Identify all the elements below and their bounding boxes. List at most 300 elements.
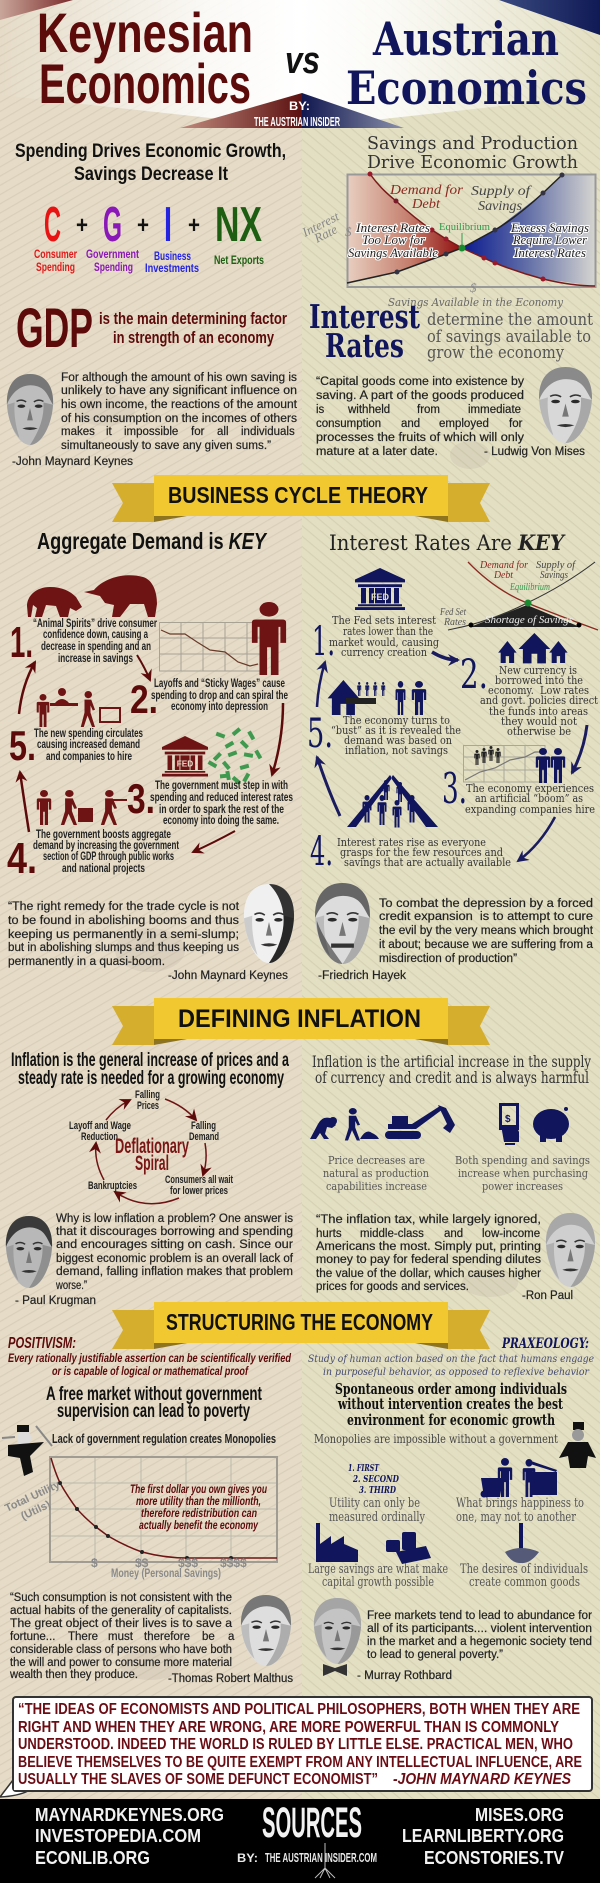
sources right: LEARNLIBERTY.ORG xyxy=(402,1826,564,1846)
sources right: MISES.ORG xyxy=(475,1805,564,1825)
quote: Malthus: The great object of their lives is to save a xyxy=(10,1618,233,1630)
footer: sources: SOURCES xyxy=(262,1799,362,1847)
quote: Rothbard: to lead to general poverty.” xyxy=(367,1649,503,1661)
step 1: currency creation xyxy=(341,646,427,659)
interest rates statement: Rates xyxy=(325,326,404,365)
step 1: decrease in spending and an xyxy=(41,639,151,653)
text: savings and desires: Large savings are what make xyxy=(308,1562,448,1577)
step 3: 3. xyxy=(127,775,155,822)
quote: Keynes: -John Maynard Keynes xyxy=(168,970,288,982)
heading: Interest Rates Are KEY xyxy=(329,530,566,555)
GDP statement: is the main determining factor xyxy=(99,309,287,328)
diagram: deflationary spiral xyxy=(69,1089,233,1204)
icon: bear xyxy=(27,587,82,617)
sources right: ECONSTORIES.TV xyxy=(424,1848,564,1868)
quote: Ron Paul: middle-class xyxy=(360,1228,424,1240)
GDP formula: + xyxy=(76,212,88,239)
quote: Mises: - Ludwig Von Mises xyxy=(484,446,585,458)
subheading xyxy=(46,1384,262,1422)
portrait: Hayek xyxy=(315,883,370,964)
GDP formula: NX xyxy=(215,198,262,252)
portrait: Keynes xyxy=(244,884,294,963)
quote: Keynes: to be found in abolishing booms and thus xyxy=(8,915,239,927)
ordinal list xyxy=(348,1464,399,1496)
root mark xyxy=(315,1843,335,1878)
quote: Hayek: the evil by the very means which brought xyxy=(379,925,594,937)
GDP statement: in strength of an economy xyxy=(113,328,274,347)
quote: Malthus: therefore xyxy=(144,1631,190,1643)
text: price decreases xyxy=(323,1154,429,1193)
chart: supply and demand for savings: Interest xyxy=(299,208,342,240)
chart: supply and demand for savings: Supply of xyxy=(471,184,532,199)
chart: diminishing utility: (Utils) xyxy=(19,1499,53,1523)
quote: Mises: saving. A part of the goods produced xyxy=(316,390,524,402)
arrow 5 to 1 xyxy=(19,662,35,714)
quote: Mises: from xyxy=(417,404,440,416)
definition xyxy=(308,1354,594,1378)
step 5: 5. xyxy=(307,711,333,757)
step 5: 5. xyxy=(9,722,36,769)
GDP formula: + xyxy=(188,212,200,239)
chart: supply and demand for savings: Savings Available xyxy=(348,245,438,260)
chart: supply and demand for savings: Demand for xyxy=(389,183,464,198)
diagram: deflationary spiral: Prices xyxy=(137,1100,159,1112)
quote: Keynes: makes xyxy=(61,426,95,438)
text: utility and happiness xyxy=(329,1496,584,1525)
quote: Keynes: keeping us permanently in a semi-slump; xyxy=(8,929,239,941)
byline: THE AUSTRIAN INSIDER.COM xyxy=(265,1850,377,1865)
quote: Mises: and xyxy=(401,418,420,430)
step 2: New currency is xyxy=(499,664,577,677)
step 5: “bust” as it is revealed the xyxy=(331,724,461,737)
quote: Hayek: it about; because we are suffering from a xyxy=(379,939,594,951)
ordinal list: 3. THIRD xyxy=(359,1486,396,1496)
step 1 xyxy=(312,614,439,665)
quote: Mises: is xyxy=(316,404,325,416)
portrait: Mises xyxy=(539,367,592,443)
title: Keynesian Economics: Keynesian xyxy=(37,1,253,64)
title: Austrian Economics: Austrian xyxy=(372,12,559,66)
callout: Keynes closing quote xyxy=(0,1697,592,1797)
banner: Structuring the Economy: STRUCTURING THE ECONOMY xyxy=(166,1309,433,1335)
step 5: causing increased demand xyxy=(37,737,140,751)
quote: Malthus: wealth then they produce. xyxy=(9,1669,138,1681)
quote: Krugman: and encourages sitting on cash. Since our xyxy=(56,1239,293,1251)
sources left: INVESTOPEDIA.COM xyxy=(35,1826,201,1846)
interest rates description: grow the economy xyxy=(427,343,564,363)
step 3 xyxy=(442,764,595,816)
step 4: The government boosts aggregate xyxy=(36,827,171,841)
chart: supply and demand for savings: Require Lower xyxy=(512,232,588,247)
step 1: 1. xyxy=(312,619,335,665)
icon: bull xyxy=(84,575,157,617)
step 4: section of GDP through public works xyxy=(43,849,174,863)
quote: Keynes: his own income, the reactions of the amount xyxy=(61,399,298,411)
quote: Krugman: that it discourages borrowing and spending xyxy=(56,1226,293,1238)
panel: Keynesian business cycle xyxy=(7,528,293,883)
GDP statement xyxy=(16,296,287,359)
definition: or is capable of logical or mathematical proof xyxy=(52,1364,249,1378)
text: price decreases: capabilities increase xyxy=(326,1180,427,1193)
chart: supply and demand for savings: Equilibrium xyxy=(439,222,490,233)
step 4: grasps for the few resources and xyxy=(340,846,503,859)
byline: BY: xyxy=(237,1851,258,1865)
quote: Rothbard: in the market and a hegemonic society tend xyxy=(367,1636,592,1648)
chart: fed set rates: Debt xyxy=(493,570,513,581)
icons: government workers xyxy=(37,790,127,825)
chart: diminishing utility: more utility than the millionth, xyxy=(136,1494,261,1508)
text: price decreases: Price decreases are xyxy=(328,1154,425,1167)
chart: supply and demand for savings: Rate xyxy=(311,221,340,246)
step 2: 2. xyxy=(130,678,158,722)
ordinal list: 1. FIRST xyxy=(348,1464,380,1474)
chart: fed set rates: Supply of xyxy=(536,560,576,571)
subheading: supervision can lead to poverty xyxy=(57,1401,250,1422)
chart: diminishing utility: $$$ xyxy=(178,1556,198,1570)
chart: supply and demand for savings: Too Low for xyxy=(362,232,426,247)
icon: monopoly man xyxy=(2,1425,52,1476)
GDP labels: Spending xyxy=(94,260,133,274)
step 1: 1. xyxy=(10,618,33,667)
banner: Business Cycle Theory xyxy=(112,475,490,522)
subheading: A free market without government xyxy=(46,1384,262,1405)
icon: houses xyxy=(498,633,568,663)
quote: Keynes: “The right remedy for the trade cycle is not xyxy=(8,901,240,913)
quote: Keynes xyxy=(8,901,288,982)
chart: diminishing utility: $$ xyxy=(135,1556,149,1570)
chart: fed set rates xyxy=(439,560,598,630)
step 3: in order to spark the rest of the xyxy=(159,802,284,816)
icons: shop and customer xyxy=(37,688,120,727)
chart: diminishing utility: therefore redistribution can xyxy=(141,1506,257,1520)
corner triangle left xyxy=(0,0,73,20)
heading xyxy=(312,1052,591,1087)
quote: Ron Paul: -Ron Paul xyxy=(522,1290,573,1302)
quote: Hayek xyxy=(318,898,594,982)
arrow 2 to 3 xyxy=(572,725,587,773)
title: Austrian Economics xyxy=(346,12,587,115)
GDP labels: Consumer xyxy=(34,247,77,261)
quote: Keynes: simultaneously to save any given sums.” xyxy=(61,440,271,452)
heading: Aggregate Demand is KEY xyxy=(37,528,268,554)
icon: money stack xyxy=(386,1532,431,1564)
heading: Spending Drives Economic Growth, xyxy=(15,141,286,162)
quote: Krugman: Why is low inflation a problem? One answer is xyxy=(56,1213,293,1225)
quote: Ron Paul: prices for goods and services. xyxy=(316,1281,469,1293)
step 1: The Fed sets interest xyxy=(332,614,437,627)
quote: Ron Paul xyxy=(316,1214,573,1302)
GDP labels: Business xyxy=(154,249,191,263)
chart: supply and demand for savings: Interest Rates xyxy=(513,245,586,260)
quote: Keynes: individuals xyxy=(241,426,295,438)
chart: supply and demand for savings xyxy=(299,172,596,295)
arrow 5 to 1 xyxy=(317,662,325,707)
icon: factory xyxy=(316,1523,358,1562)
label: Lack of government regulation creates Monopolies xyxy=(52,1431,276,1446)
chart: supply and demand for savings: Excess Savings xyxy=(510,220,589,235)
portrait: Rothbard xyxy=(314,1598,361,1676)
quote: Keynes: For although the amount of his own saving is xyxy=(61,372,297,384)
text: savings and desires xyxy=(308,1562,588,1590)
quote: Keynes: for xyxy=(191,426,205,438)
interest rates statement: Interest xyxy=(309,297,421,336)
icon: poor monopoly man xyxy=(559,1422,596,1468)
quote: Malthus: actual habits of the generality of capitalists. xyxy=(10,1605,232,1617)
step 1: market would, causing xyxy=(329,636,439,649)
interest rates statement xyxy=(309,297,421,365)
step 4 xyxy=(7,827,179,883)
arrow 3 to 4 xyxy=(193,831,235,852)
step 2: the funds into areas xyxy=(489,705,588,718)
banner: Defining Inflation: DEFINING INFLATION xyxy=(178,1005,421,1033)
chart: fed set rates: Fed Set xyxy=(439,607,466,618)
text: price decreases: natural as production xyxy=(323,1167,429,1180)
banner: Structuring the Economy xyxy=(112,1302,490,1349)
step 2: otherwise be xyxy=(507,725,571,738)
chart: fed set rates: Rates xyxy=(443,617,466,628)
chart: diminishing utility: Money (Personal Savings) xyxy=(111,1566,221,1580)
step 3: economy into doing the same. xyxy=(163,813,279,827)
quote: Mises: mature at a later date. xyxy=(316,446,438,458)
step 2: spending to drop and can spiral the xyxy=(151,688,288,702)
GDP labels: Investments xyxy=(145,261,199,275)
ordinal list: 2. SECOND xyxy=(352,1475,399,1485)
step 4: 4. xyxy=(310,829,333,875)
diagram: deflationary spiral: Spiral xyxy=(135,1152,169,1175)
quote: Keynes: it xyxy=(106,426,113,438)
GDP formula: G xyxy=(103,198,122,252)
quote: Krugman: demand, falling inflation makes that problem xyxy=(56,1266,293,1278)
step 3: 3. xyxy=(442,764,467,813)
icons: workers and excavator xyxy=(310,1105,455,1140)
step 4: and national projects xyxy=(62,861,145,875)
quote: Malthus: considerable class of persons who have both xyxy=(10,1644,232,1656)
step 4: 4. xyxy=(7,834,37,883)
diagram: deflationary spiral: Layoff and Wage xyxy=(69,1120,131,1132)
byline banner: BY: xyxy=(289,99,310,113)
step 5: The new spending circulates xyxy=(34,726,143,740)
icon: grass root xyxy=(505,1523,539,1563)
panel: Austrian business cycle xyxy=(307,530,598,875)
portrait: Ron Paul xyxy=(546,1213,595,1287)
text: savings and desires: capital growth possible xyxy=(322,1575,434,1590)
text: spending and savings xyxy=(455,1154,590,1193)
byline xyxy=(237,1850,377,1865)
quote: Mises: “Capital goods come into existence by xyxy=(316,376,524,388)
header xyxy=(0,0,600,129)
quote: Malthus: There xyxy=(68,1631,98,1643)
text: utility and happiness: Utility can only be xyxy=(329,1496,420,1511)
quote: Krugman: worse.” xyxy=(55,1280,87,1292)
title: Keynesian Economics: Economics xyxy=(39,52,251,115)
banner: Defining Inflation xyxy=(112,998,490,1045)
chart: boom xyxy=(463,745,545,782)
quote: Krugman: biggest economic problem is an overall lack of xyxy=(56,1253,294,1265)
portrait: Keynes xyxy=(7,374,53,445)
quote: Krugman: - Paul Krugman xyxy=(15,1295,96,1307)
panel: Keynesian inflation xyxy=(6,1050,294,1307)
quote: Rothbard xyxy=(357,1610,592,1682)
quote: Keynes: impossible xyxy=(124,426,178,438)
arrow 4 to 5 xyxy=(20,772,29,832)
quote: Ron Paul: hurts xyxy=(316,1228,342,1240)
step 4 xyxy=(310,829,511,875)
chart: diminishing utility: $$$$ xyxy=(220,1556,247,1570)
GDP labels xyxy=(34,247,264,275)
arrow 2 to 3 xyxy=(272,703,283,775)
quote: Rothbard: - Murray Rothbard xyxy=(357,1670,452,1682)
quote: Hayek: -Friedrich Hayek xyxy=(318,970,406,982)
chart: diminishing utility: Total Utility xyxy=(3,1479,63,1515)
heading: Savings Decrease It xyxy=(74,164,229,185)
icons: hand with money and piggy bank: $ xyxy=(505,1114,511,1125)
step 1 xyxy=(10,616,157,667)
step 2: borrowed into the xyxy=(495,674,583,687)
heading xyxy=(11,1050,289,1089)
quote: Mises: for xyxy=(509,418,523,430)
quote: Malthus: the will and power to consume more material xyxy=(10,1657,232,1669)
GDP labels: Government xyxy=(86,247,139,261)
quote: Mises: immediate xyxy=(468,404,521,416)
heading: Savings and Production xyxy=(367,133,578,154)
quote: Ron Paul: the value of the dollar, which causes higher xyxy=(316,1268,541,1280)
arrow 4 to 5 xyxy=(317,757,340,816)
quote: Hayek: credit expansion is to attempt to cure xyxy=(379,911,593,923)
diagram: deflationary spiral: Consumers all wait xyxy=(165,1174,233,1186)
arrow 3 to 4 xyxy=(518,817,555,861)
sources right xyxy=(402,1805,564,1868)
icons: trash and treasure xyxy=(480,1458,557,1498)
chart: fed set rates: Savings xyxy=(540,570,568,581)
quote: Keynes: but in abolishing slumps and thus keeping us xyxy=(8,942,239,954)
step 3: spending and reduced interest rates xyxy=(150,790,293,804)
step 2: economy into depression xyxy=(171,699,268,713)
title: Keynesian Economics xyxy=(37,1,253,115)
chart: falling market xyxy=(159,622,260,671)
heading xyxy=(367,133,578,173)
GDP formula: I xyxy=(164,198,172,252)
step 1: confidence down, causing a xyxy=(43,627,148,641)
quote: Mises: withheld xyxy=(347,404,390,416)
quote: Hayek: misdirection of production” xyxy=(379,953,517,965)
step 2: they would not xyxy=(501,715,578,728)
callout: Keynes closing quote: USUALLY THE SLAVES OF SOME DEFUNCT ECONOMIST” xyxy=(18,1771,378,1788)
quote: Malthus: a xyxy=(228,1631,235,1643)
definition: Every rationally justifiable assertion can be scientifically verified xyxy=(8,1351,292,1365)
chart: fed set rates: Demand for xyxy=(479,560,528,571)
diagram: deflationary spiral: Bankruptcies xyxy=(88,1180,137,1192)
icon: Fed building: FED xyxy=(177,759,193,768)
GDP statement: GDP xyxy=(16,296,93,359)
panel: Austrian growth xyxy=(299,133,596,458)
quote: Keynes xyxy=(12,372,298,468)
icons: foreclosure scene xyxy=(328,680,426,715)
portrait: Krugman xyxy=(6,1216,52,1288)
quote: Malthus: -Thomas Robert Malthus xyxy=(168,1673,293,1685)
quote: Malthus: “Such consumption is not consistent with the xyxy=(10,1592,232,1604)
subheading xyxy=(335,1380,567,1429)
panel: business cycle quotes xyxy=(8,883,594,982)
interest rates description xyxy=(427,310,593,363)
chart: fed set rates: Shortage of Savings xyxy=(485,615,573,626)
corner triangle right xyxy=(499,0,600,35)
heading xyxy=(15,141,286,185)
GDP labels: Net Exports xyxy=(214,253,264,267)
step 2: 2. xyxy=(460,652,488,698)
quote: Mises: consumption xyxy=(316,418,381,430)
diagram: deflationary spiral: Demand xyxy=(189,1131,219,1143)
step 1: increase in savings xyxy=(58,651,133,665)
text: utility and happiness: measured ordinally xyxy=(329,1510,425,1525)
text: spending and savings: power increases xyxy=(482,1180,563,1193)
icon: Fed building xyxy=(355,568,405,610)
heading: steady rate is needed for a growing economy xyxy=(18,1068,284,1089)
quote: Malthus: must xyxy=(108,1631,134,1643)
heading: Inflation is the general increase of prices and a xyxy=(11,1050,289,1071)
step 5 xyxy=(9,722,143,769)
step 1: rates lower than the xyxy=(343,625,433,638)
definition: in purposeful behavior, as opposed to reflexive behavior xyxy=(323,1367,590,1378)
quote: Malthus: be xyxy=(202,1631,215,1643)
chart: supply and demand for savings: Debt xyxy=(411,197,441,212)
panel: Keynesian growth xyxy=(7,141,298,468)
chart: fed set rates: Equilibrium xyxy=(509,582,550,593)
icon: happy men xyxy=(536,748,565,783)
quote: Ron Paul: Americans the most. Simply put, printing xyxy=(316,1241,541,1253)
step 5: inflation, not savings xyxy=(345,744,448,757)
panel: Praxeology xyxy=(308,1336,596,1682)
icon: worried man xyxy=(252,602,286,675)
heading: Drive Economic Growth xyxy=(367,152,578,173)
chart: diminishing utility: The first dollar you own gives you xyxy=(130,1482,267,1496)
quote: Keynes: all xyxy=(217,426,229,438)
step 5 xyxy=(307,711,461,757)
byline banner: THE AUSTRIAN INSIDER xyxy=(254,114,340,129)
quote: Keynes: -John Maynard Keynes xyxy=(12,456,133,468)
heading: POSITIVISM: xyxy=(8,1335,76,1352)
quote: Keynes: of his consumption on the incomes of others xyxy=(61,413,297,425)
chart: supply and demand for savings: Interest Rates xyxy=(355,220,430,235)
step 5: demand was based on xyxy=(344,734,452,747)
footer: sources xyxy=(0,1799,600,1883)
quote: Malthus: fortune... xyxy=(10,1631,55,1643)
banner: Business Cycle Theory: BUSINESS CYCLE THEORY xyxy=(168,482,428,508)
quote: Rothbard: all of its participants.... violent intervention xyxy=(367,1623,592,1635)
sources left xyxy=(35,1805,224,1868)
step 1: “Animal Spirits” drive consumer xyxy=(33,616,157,630)
icon: crowd grasping xyxy=(347,775,438,828)
sources left: MAYNARDKEYNES.ORG xyxy=(35,1805,224,1825)
quote: Mises: employed xyxy=(439,418,489,430)
quote: Rothbard: Free markets tend to lead to abundance for xyxy=(367,1610,592,1622)
arrow 1 to 2 xyxy=(137,655,150,680)
step 4: Interest rates rise as everyone xyxy=(337,836,486,849)
quote: Ron Paul: “The inflation tax, while largely ignored, xyxy=(316,1214,541,1226)
step 4: demand by increasing the government xyxy=(33,838,179,852)
panel: Austrian inflation xyxy=(310,1052,595,1302)
diagram: deflationary spiral: Deflationary xyxy=(115,1135,189,1158)
step 4: savings that are actually available xyxy=(344,856,511,869)
quote: Ron Paul: low-income xyxy=(482,1228,540,1240)
step 5: and companies to hire xyxy=(46,749,132,763)
chart: supply and demand for savings: Savings xyxy=(478,199,523,214)
GDP labels: Spending xyxy=(36,260,75,274)
panel: Positivism xyxy=(2,1335,293,1685)
GDP formula xyxy=(44,198,262,252)
chart: diminishing utility: actually benefit the economy xyxy=(139,1518,259,1532)
step 2: economy. Low rates xyxy=(488,684,589,697)
chart: supply and demand for savings: $ xyxy=(470,280,477,295)
